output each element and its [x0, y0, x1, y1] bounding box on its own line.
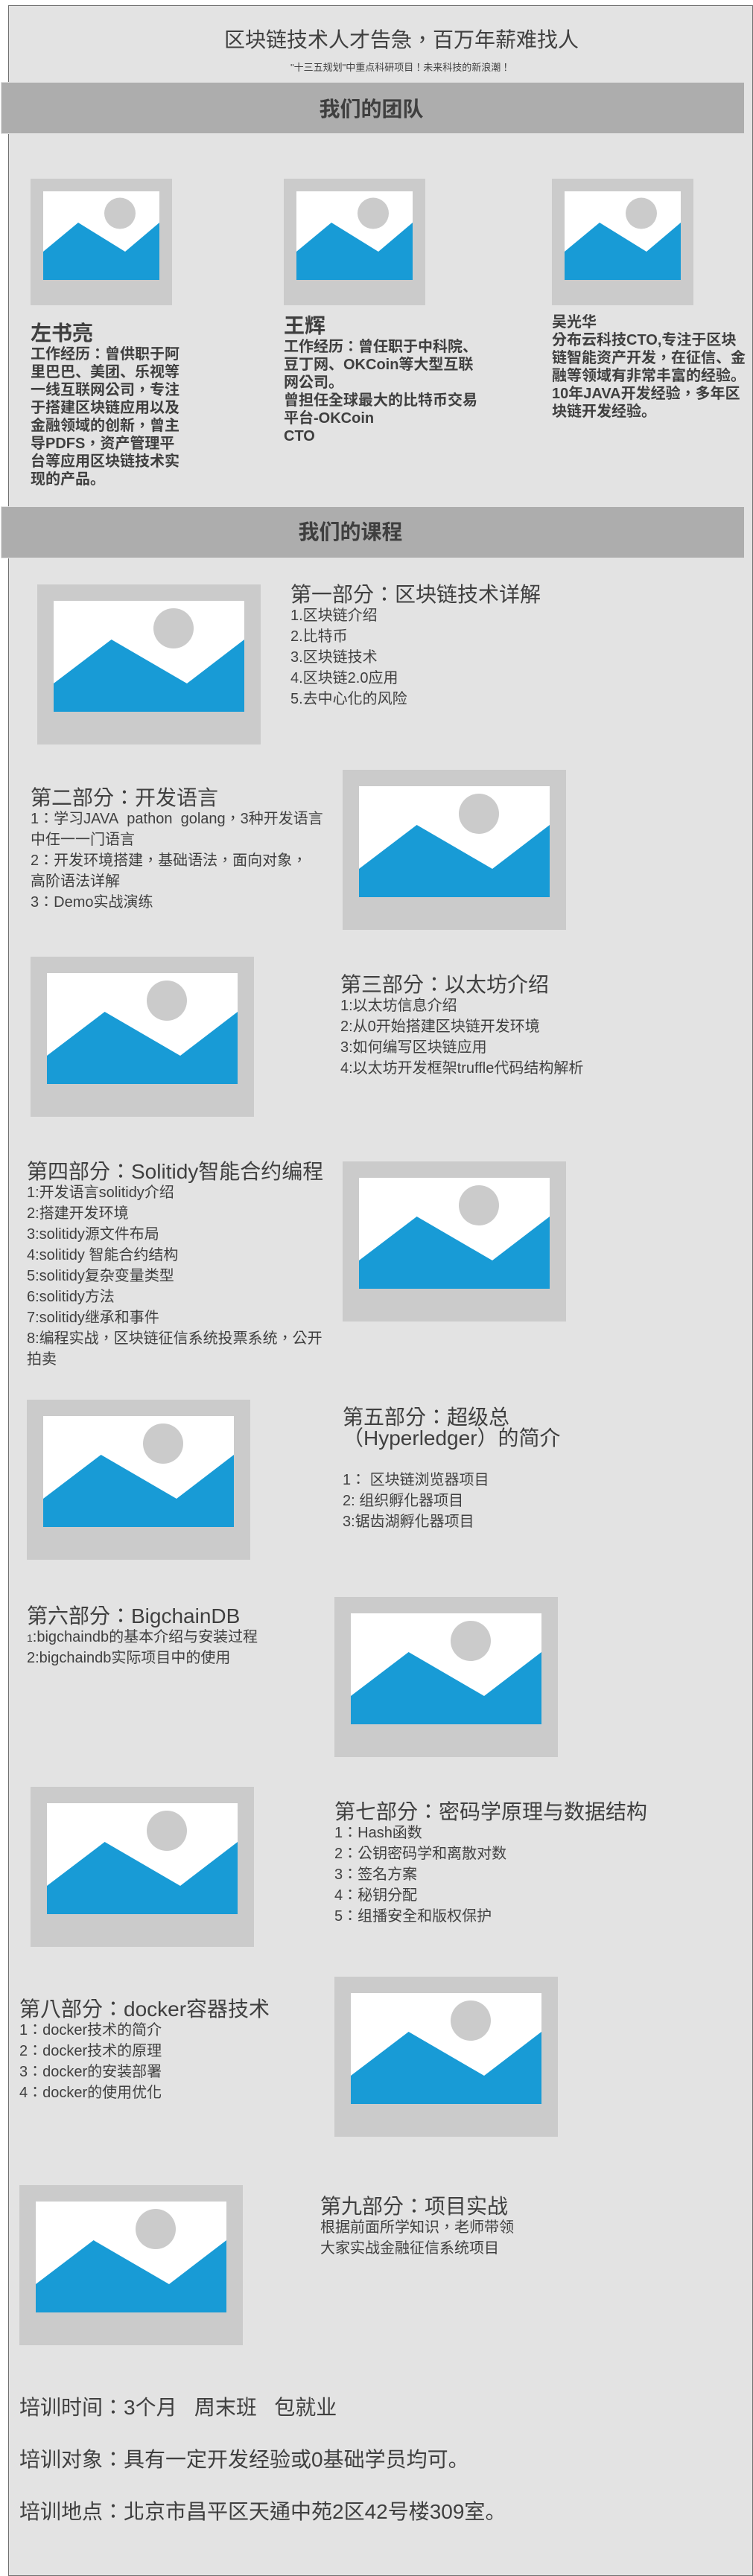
team member: 吴光华: 10年JAVA开发经验，多年区 — [552, 386, 740, 402]
course text: part 9: 大家实战金融征信系统项目 — [320, 2240, 499, 2257]
course text: part 4: 4:solitidy 智能合约结构 — [27, 1247, 178, 1263]
course text: part 1: 第一部分：区块链技术详解 — [290, 583, 541, 606]
course text: part 2: 第二部分：开发语言 — [31, 786, 218, 809]
course text: part 8: 第八部分：docker容器技术 — [19, 1998, 270, 2021]
course text: part 3: 2:从0开始搭建区块链开发环境 — [340, 1018, 540, 1035]
course text: part 7: 1：Hash函数 — [334, 1825, 422, 1841]
course text: part 4: 3:solitidy源文件布局 — [27, 1226, 159, 1243]
heading band: team: 我们的团队 — [319, 98, 423, 121]
image placeholder: part 1 — [37, 584, 261, 745]
team member: 左书亮: 导PDFS，资产管理平 — [31, 436, 174, 452]
course text: part 7: 2：公钥密码学和离散对数 — [334, 1846, 506, 1862]
course text: part 4: 5:solitidy复杂变量类型 — [27, 1268, 174, 1284]
training info — [19, 2396, 506, 2523]
course text: part 5: 1： 区块链浏览器项目 — [343, 1472, 489, 1488]
course text: part 4: 6:solitidy方法 — [27, 1289, 115, 1305]
course text: part 4: 8:编程实战，区块链征信系统投票系统，公开 — [27, 1330, 323, 1347]
course text: part 4: 7:solitidy继承和事件 — [27, 1310, 159, 1326]
team member: 左书亮: 金融领域的创新，曾主 — [31, 418, 179, 434]
image placeholder: part 6 — [334, 1597, 558, 1757]
team member: 吴光华: 链智能资产开发，在征信、金 — [552, 350, 746, 366]
course text: part 4: 1:开发语言solitidy介绍 — [27, 1185, 174, 1201]
course text: part 8 — [19, 1998, 270, 2101]
image placeholder: member 3 — [552, 179, 693, 305]
image placeholder: part 5 — [27, 1400, 250, 1560]
course text: part 1: 2.比特币 — [290, 628, 348, 645]
training info: 培训时间：3个月 周末班 包就业 — [19, 2396, 337, 2419]
course text: part 6: 第六部分：BigchainDB — [27, 1604, 240, 1627]
team member: 王辉: CTO — [284, 428, 315, 444]
team member: 王辉: 工作经历：曾任职于中科院、 — [284, 339, 477, 355]
course text: part 1: 1.区块链介绍 — [290, 608, 378, 624]
team member: 王辉: 平台-OKCoin — [284, 410, 374, 427]
team member: 左书亮: 于搭建区块链应用以及 — [31, 400, 179, 416]
course text: part 3: 1:以太坊信息介绍 — [340, 998, 457, 1014]
title: 区块链技术人才告急，百万年薪难找人 — [224, 28, 579, 51]
course text: part 1 — [290, 583, 541, 707]
course text: part 4 — [27, 1160, 323, 1368]
team member: 左书亮: 工作经历：曾供职于阿 — [31, 346, 179, 363]
team member: 左书亮 — [31, 322, 179, 488]
course text: part 2: 中任一一门语言 — [31, 832, 135, 848]
heading band: courses — [1, 506, 745, 558]
course text: part 2: 3：Demo实战演练 — [31, 894, 153, 911]
team member: 吴光华 — [552, 314, 746, 420]
course text: part 9 — [320, 2195, 514, 2257]
course text: part 8: 4：docker的使用优化 — [19, 2085, 162, 2101]
course text: part 9: 第九部分：项目实战 — [320, 2195, 508, 2218]
team member: 左书亮: 一线互联网公司，专注 — [31, 382, 179, 398]
team member: 吴光华: 吴光华 — [552, 314, 597, 331]
image placeholder: part 2 — [343, 770, 566, 930]
image placeholder: member 1 — [31, 179, 172, 305]
team member: 王辉 — [284, 314, 477, 444]
image placeholder: part 3 — [31, 957, 254, 1117]
training info: 培训对象：具有一定开发经验或0基础学员均可。 — [19, 2448, 469, 2471]
team member: 左书亮: 里巴巴、美团、乐视等 — [31, 364, 179, 380]
course text: part 6: 1:bigchaindb的基本介绍与安装过程 — [27, 1629, 258, 1645]
team member: 王辉: 网公司。 — [284, 374, 343, 391]
course text: part 4: 拍卖 — [27, 1351, 57, 1368]
course text: part 2 — [31, 786, 323, 911]
training info: 培训地点：北京市昌平区天通中苑2区42号楼309室。 — [19, 2500, 506, 2523]
subtitle: "十三五规划"中重点科研项目！未来科技的新浪潮！ — [290, 62, 510, 73]
course text: part 5: 第五部分：超级总 — [343, 1406, 509, 1429]
image placeholder: part 4 — [343, 1161, 566, 1322]
heading band: courses: 我们的课程 — [298, 520, 402, 543]
course text: part 3 — [340, 973, 583, 1077]
course text: part 8: 2：docker技术的原理 — [19, 2043, 162, 2059]
image placeholder: part 8 — [334, 1977, 558, 2137]
course text: part 7: 第七部分：密码学原理与数据结构 — [334, 1800, 647, 1823]
course text: part 7: 4：秘钥分配 — [334, 1887, 417, 1904]
course text: part 3: 第三部分：以太坊介绍 — [340, 973, 549, 996]
course text: part 9: 根据前面所学知识，老师带领 — [320, 2219, 514, 2236]
course text: part 5: 2: 组织孵化器项目 — [343, 1493, 463, 1509]
team member: 吴光华: 融等领域有非常丰富的经验。 — [552, 368, 746, 384]
course text: part 6 — [27, 1604, 258, 1666]
heading band: team — [1, 82, 745, 134]
team member: 左书亮: 台等应用区块链技术实 — [31, 453, 179, 470]
team member: 吴光华: 块链开发经验。 — [552, 404, 656, 420]
team member: 王辉: 曾担任全球最大的比特币交易 — [284, 392, 477, 409]
course text: part 7: 5：组播安全和版权保护 — [334, 1908, 492, 1925]
image placeholder: part 9 — [19, 2185, 243, 2345]
course text: part 4: 第四部分：Solitidy智能合约编程 — [27, 1160, 323, 1183]
course text: part 7 — [334, 1800, 647, 1925]
team member: 左书亮: 现的产品。 — [31, 471, 105, 488]
team member: 吴光华: 分布云科技CTO,专注于区块 — [552, 332, 736, 348]
course text: part 6: 2:bigchaindb实际项目中的使用 — [27, 1650, 230, 1666]
team member: 王辉: 豆丁网、OKCoin等大型互联 — [284, 357, 473, 373]
course text: part 2: 2：开发环境搭建，基础语法，面向对象， — [31, 852, 307, 869]
image placeholder: member 2 — [284, 179, 425, 305]
course text: part 8: 3：docker的安装部署 — [19, 2064, 162, 2080]
course text: part 7: 3：签名方案 — [334, 1866, 417, 1883]
course text: part 2: 高阶语法详解 — [31, 873, 120, 890]
course text: part 1: 5.去中心化的风险 — [290, 691, 407, 707]
course text: part 1: 4.区块链2.0应用 — [290, 670, 398, 686]
course text: part 5 — [343, 1406, 561, 1530]
course text: part 8: 1：docker技术的简介 — [19, 2022, 162, 2038]
course text: part 3: 4:以太坊开发框架truffle代码结构解析 — [340, 1060, 583, 1077]
course text: part 1: 3.区块链技术 — [290, 649, 378, 666]
course text: part 3: 3:如何编写区块链应用 — [340, 1039, 487, 1056]
course text: part 5: （Hyperledger）的简介 — [343, 1426, 561, 1450]
team member: 王辉: 王辉 — [284, 314, 325, 337]
course text: part 5: 3:锯齿湖孵化器项目 — [343, 1514, 474, 1530]
course text: part 2: 1：学习JAVA pathon golang，3种开发语言 — [31, 811, 323, 827]
course text: part 4: 2:搭建开发环境 — [27, 1205, 129, 1222]
image placeholder: part 7 — [31, 1787, 254, 1947]
team member: 左书亮: 左书亮 — [31, 322, 93, 345]
